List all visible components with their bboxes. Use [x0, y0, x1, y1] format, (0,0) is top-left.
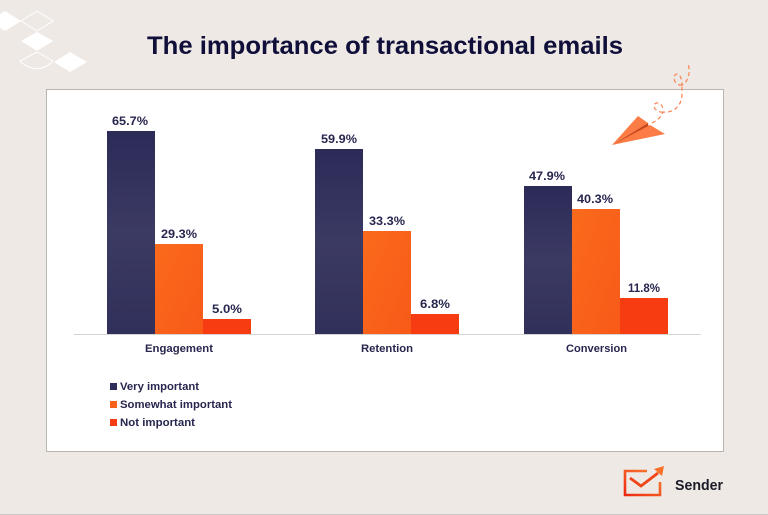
logo: Sender: Sender: [675, 478, 723, 494]
group: Engagement: 29.3%: [161, 229, 197, 241]
icon: paper airplane with dashed trail: [612, 64, 689, 145]
group: Retention: Retention: [361, 343, 413, 355]
group: Retention: 6.8%: [420, 299, 450, 311]
panel: chart card: [46, 90, 724, 452]
group: Conversion: Conversion: [566, 343, 627, 355]
group: Conversion: 47.9%: [529, 171, 565, 183]
legend: [110, 381, 232, 429]
group: Conversion: [524, 171, 668, 355]
group: Conversion: 40.3%: [577, 194, 613, 206]
group: Engagement: 5.0%: [212, 304, 242, 316]
bar chart: [74, 116, 701, 355]
group: Conversion: 11.8%: [628, 283, 660, 295]
legend: Not important: [120, 417, 195, 429]
group: Engagement: 65.7%: [112, 116, 148, 128]
group: Retention: 33.3%: [369, 216, 405, 228]
group: Retention: [315, 134, 459, 355]
legend: Somewhat important: [120, 399, 232, 411]
logo: Sender: [625, 466, 723, 495]
bottom edge line: [0, 514, 768, 515]
decorative diamonds: [0, 11, 87, 72]
title: The importance of transactional emails: [147, 32, 623, 60]
legend: Very important: [120, 381, 199, 393]
group: Retention: 59.9%: [321, 134, 357, 146]
group: Engagement: [107, 116, 251, 355]
group: Engagement: Engagement: [145, 343, 213, 355]
